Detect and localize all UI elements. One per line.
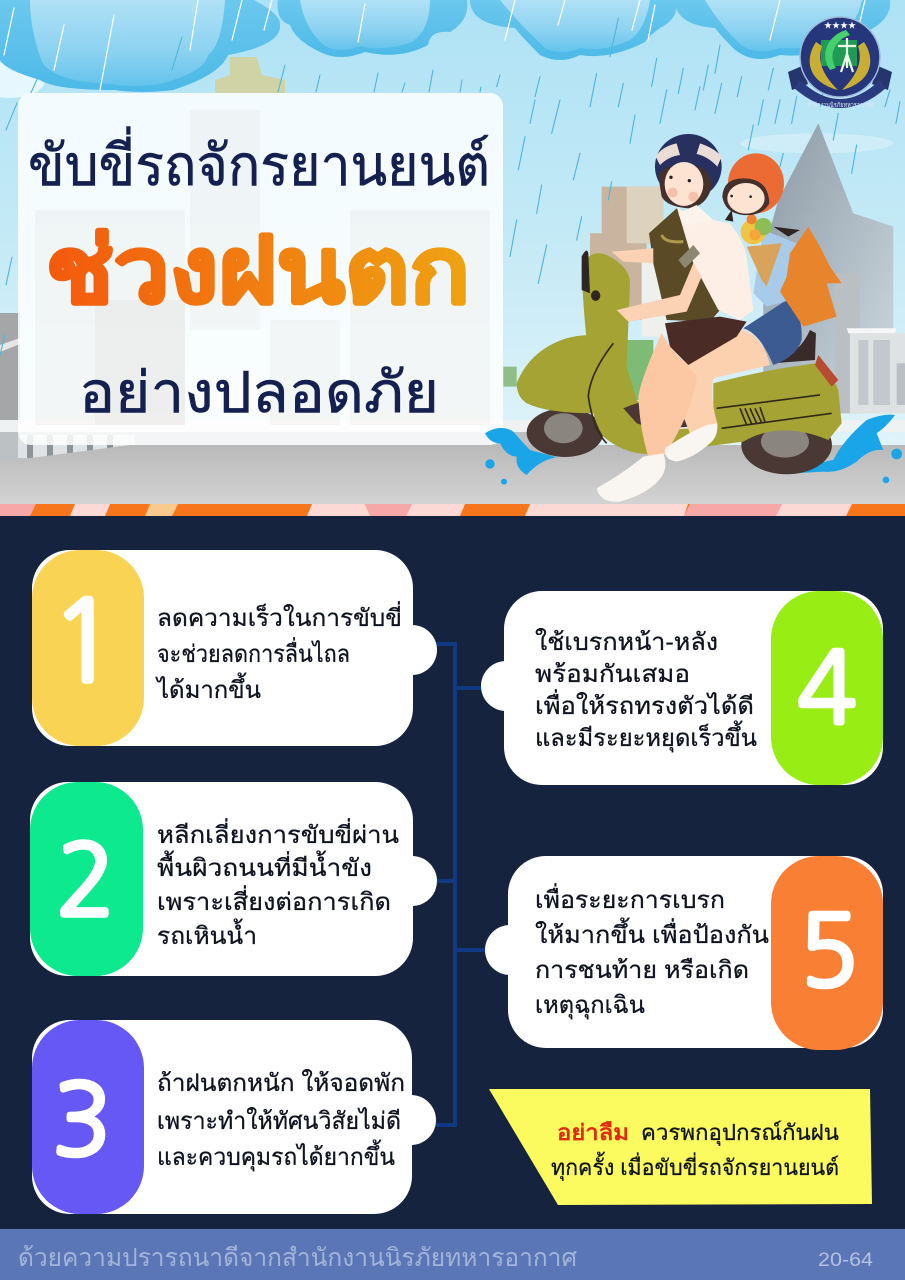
card 3 text: เพราะทำให้ทัศนวิสัยไม่ดี: [157, 1107, 401, 1135]
card 2 text: [157, 818, 399, 950]
driver head and helmet: [655, 134, 722, 227]
card 1 body: [32, 550, 437, 746]
card 1 text: ได้มากขึ้น: [155, 672, 261, 704]
footer bar: [0, 1229, 905, 1280]
title panel: [18, 93, 503, 445]
front wheel: [527, 408, 603, 457]
yellow reminder callout: [489, 1089, 872, 1205]
driver arms: [612, 248, 702, 322]
card 1 text: [155, 601, 402, 704]
card 5 body: [485, 856, 883, 1048]
road: [0, 445, 905, 505]
title line 1: ขับขี่รถจักรยานยนต์: [28, 126, 490, 198]
cloud 4: [675, 0, 890, 59]
clouds: [0, 0, 890, 92]
passenger head and helmet: [722, 153, 784, 222]
card 3 text: ถ้าฝนตกหนัก ให้จอดพัก: [157, 1069, 405, 1097]
card 3: [32, 1020, 436, 1214]
driver leg: [638, 333, 697, 457]
card 1 number: 1: [50, 586, 118, 698]
card 2 text: หลีกเลี่ยงการขับขี่ผ่าน: [157, 818, 399, 849]
connector lines: [432, 644, 488, 1125]
card 2: [30, 782, 437, 976]
logo: air force safety badge: [788, 17, 892, 109]
card 3 text: [157, 1069, 405, 1172]
footer message: ด้วยความปรารถนาดีจากสำนักงานนิรภัยทหารอากาศ: [18, 1244, 577, 1272]
card 2 number: [30, 782, 143, 976]
callout highlight word: อย่าลืม: [557, 1120, 629, 1145]
footer code: 20-64: [818, 1250, 873, 1271]
card 1: [32, 550, 437, 746]
logo: air force safety badge: สำนักงานนิรภัยทหารอากาศ: [807, 101, 874, 109]
logo: air force safety badge: ★★★★: [824, 21, 856, 30]
card 5: [485, 856, 883, 1050]
card 2 number: 2: [56, 832, 116, 930]
dark content background: [0, 518, 905, 1230]
cloud 2: [278, 0, 467, 57]
passenger: shorts: [743, 300, 802, 365]
card 5 number: 5: [799, 903, 859, 1001]
faint buildings in title panel: [35, 110, 490, 425]
callout text: ทุกครั้ง เมื่อขับขี่รถจักรยานยนต์: [551, 1152, 839, 1181]
card 4 text: พร้อมกันเสมอ: [535, 661, 690, 688]
driver shorts: [665, 317, 747, 365]
card 4 number: 4: [797, 640, 857, 738]
card 3 number: 3: [52, 1072, 112, 1170]
card 3 body: [32, 1020, 436, 1214]
callout text: ควรพกอุปกรณ์กันฝน: [641, 1120, 839, 1146]
title line 2: ช่วงฝนตก: [46, 220, 470, 322]
card 4 text: ใช้เบรกหน้า-หลัง: [535, 628, 718, 656]
card 4 text: [535, 628, 757, 753]
card 3 number: [32, 1020, 144, 1214]
bag: [780, 227, 842, 327]
card 4 body: [481, 591, 883, 785]
card 2 text: รถเหินน้ำ: [157, 918, 257, 950]
scooter body: [517, 253, 842, 454]
card 5 text: เพื่อระยะการเบรก: [535, 883, 725, 914]
scooter details: [588, 343, 832, 443]
passenger: blue top: [753, 230, 797, 307]
caution stripe: [0, 504, 905, 516]
cloud 3: [470, 0, 677, 60]
card 2 body: [30, 782, 437, 976]
title line 3: อย่างปลอดภัย: [79, 361, 439, 425]
card 5 text: [535, 883, 769, 1020]
card 1 number: [32, 550, 144, 746]
card 5 text: ให้มากขึ้น เพื่อป้องกัน: [535, 917, 769, 949]
card 2 text: เพราะเสี่ยงต่อการเกิด: [157, 885, 391, 916]
callout text: [551, 1120, 839, 1181]
card 2 text: พื้นผิวถนนที่มีน้ำขัง: [157, 850, 372, 882]
scooter seat: [773, 330, 816, 363]
card 1 text: จะช่วยลดการลื่นไถล: [157, 637, 350, 668]
illustration: couple riding a scooter through puddles: [485, 134, 902, 502]
passenger leg: [677, 330, 770, 442]
card 4 number: [771, 591, 883, 785]
card 5 text: การชนท้าย หรือเกิด: [535, 957, 749, 984]
water splash left: [485, 428, 557, 475]
card 1 text: ลดความเร็วในการขับขี่: [157, 601, 402, 632]
card 5 text: เหตุฉุกเฉิน: [535, 992, 645, 1020]
rear wheel: [741, 416, 832, 474]
passenger: white shirt and driver vest: [649, 207, 753, 322]
cloud 1: [0, 0, 280, 92]
card 5 number: [771, 856, 883, 1050]
header background: rainy city sky: [0, 0, 905, 505]
rain lines: [0, 0, 900, 355]
bouquet: [741, 214, 800, 287]
card 4 text: และมีระยะหยุดเร็วขึ้น: [535, 720, 757, 753]
water splash right: [797, 415, 895, 473]
shoes: [597, 423, 717, 502]
card 4 text: เพื่อให้รถทรงตัวได้ดี: [535, 689, 754, 720]
card 3 text: และควบคุมรถได้ยากขึ้น: [157, 1139, 395, 1172]
card 4: [481, 591, 883, 785]
